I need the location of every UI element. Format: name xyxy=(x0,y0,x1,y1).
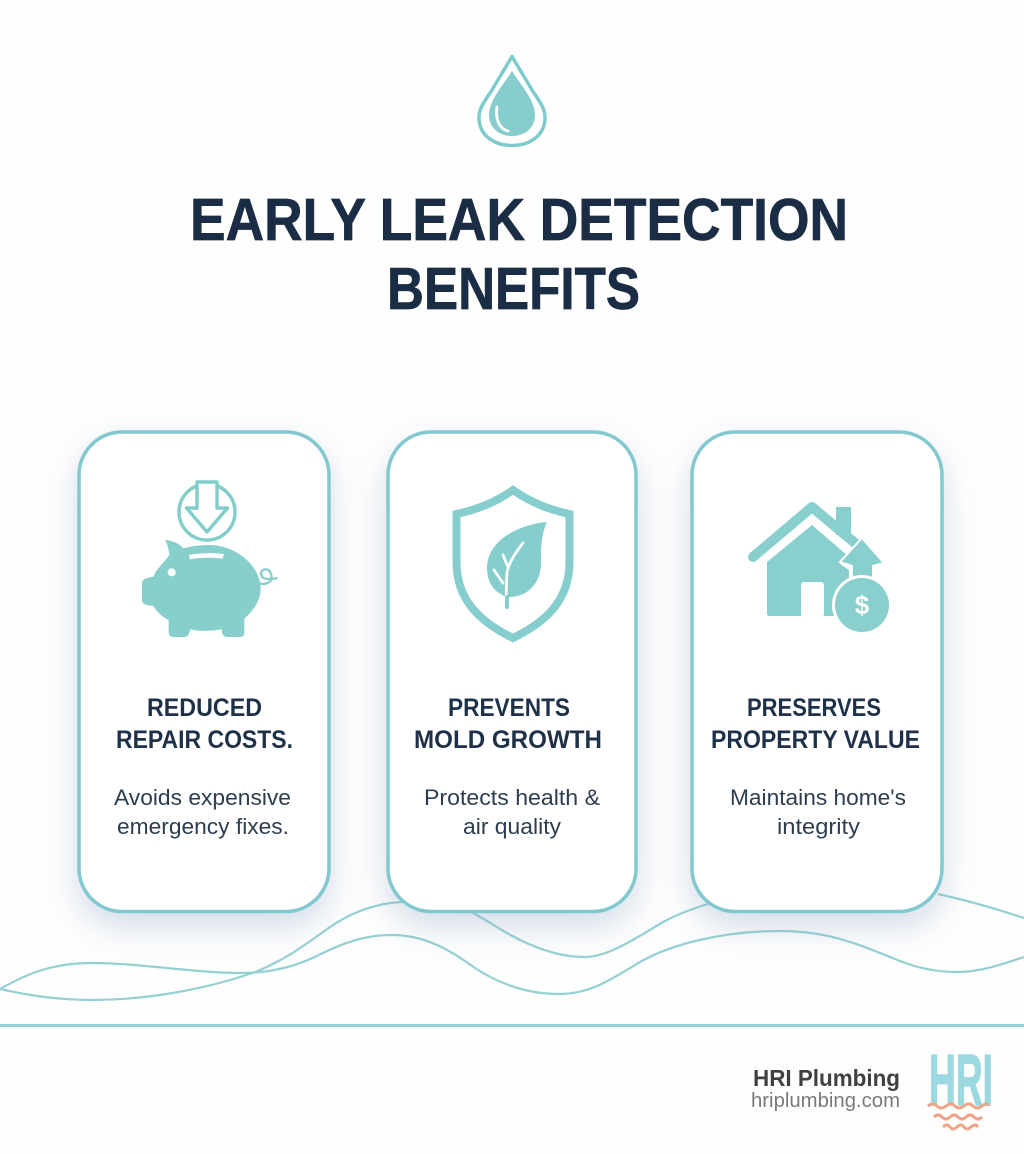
card text: Maintains home's xyxy=(730,785,906,810)
card text: Protects health & xyxy=(424,785,600,810)
card heading xyxy=(116,694,293,754)
card text: emergency fixes. xyxy=(117,814,289,839)
panel: reduced repair costs xyxy=(79,432,329,912)
footer brand text: hriplumbing.com xyxy=(751,1090,900,1112)
card heading xyxy=(414,694,602,754)
card heading: PRESERVES xyxy=(747,694,881,722)
title xyxy=(190,187,848,322)
card heading: MOLD GROWTH xyxy=(414,726,602,754)
wave lines xyxy=(0,894,1024,1000)
icon: piggy bank with down arrow xyxy=(142,482,277,637)
icon: shield with leaf xyxy=(456,490,570,638)
card text: integrity xyxy=(777,814,861,839)
card heading xyxy=(711,694,920,754)
footer brand text: HRI Plumbing xyxy=(753,1065,900,1091)
card text: Avoids expensive xyxy=(114,785,291,810)
card heading: REDUCED xyxy=(147,694,262,722)
footer brand text xyxy=(751,1065,900,1112)
card heading: PROPERTY VALUE xyxy=(711,726,920,754)
icon: house with rising value xyxy=(753,507,892,635)
logo: HRI xyxy=(928,1041,993,1129)
card text xyxy=(730,785,906,839)
icon: water drop xyxy=(479,56,545,146)
panel: prevents mold growth xyxy=(388,432,636,912)
card heading: PREVENTS xyxy=(448,694,570,722)
card text xyxy=(424,785,600,839)
icon: house with rising value: $ xyxy=(855,590,870,620)
card heading: REPAIR COSTS. xyxy=(116,726,293,754)
title: BENEFITS xyxy=(387,256,640,322)
panel: preserves property value xyxy=(692,432,942,912)
card text xyxy=(114,785,291,839)
card text: air quality xyxy=(463,814,562,839)
title: EARLY LEAK DETECTION xyxy=(190,187,848,253)
